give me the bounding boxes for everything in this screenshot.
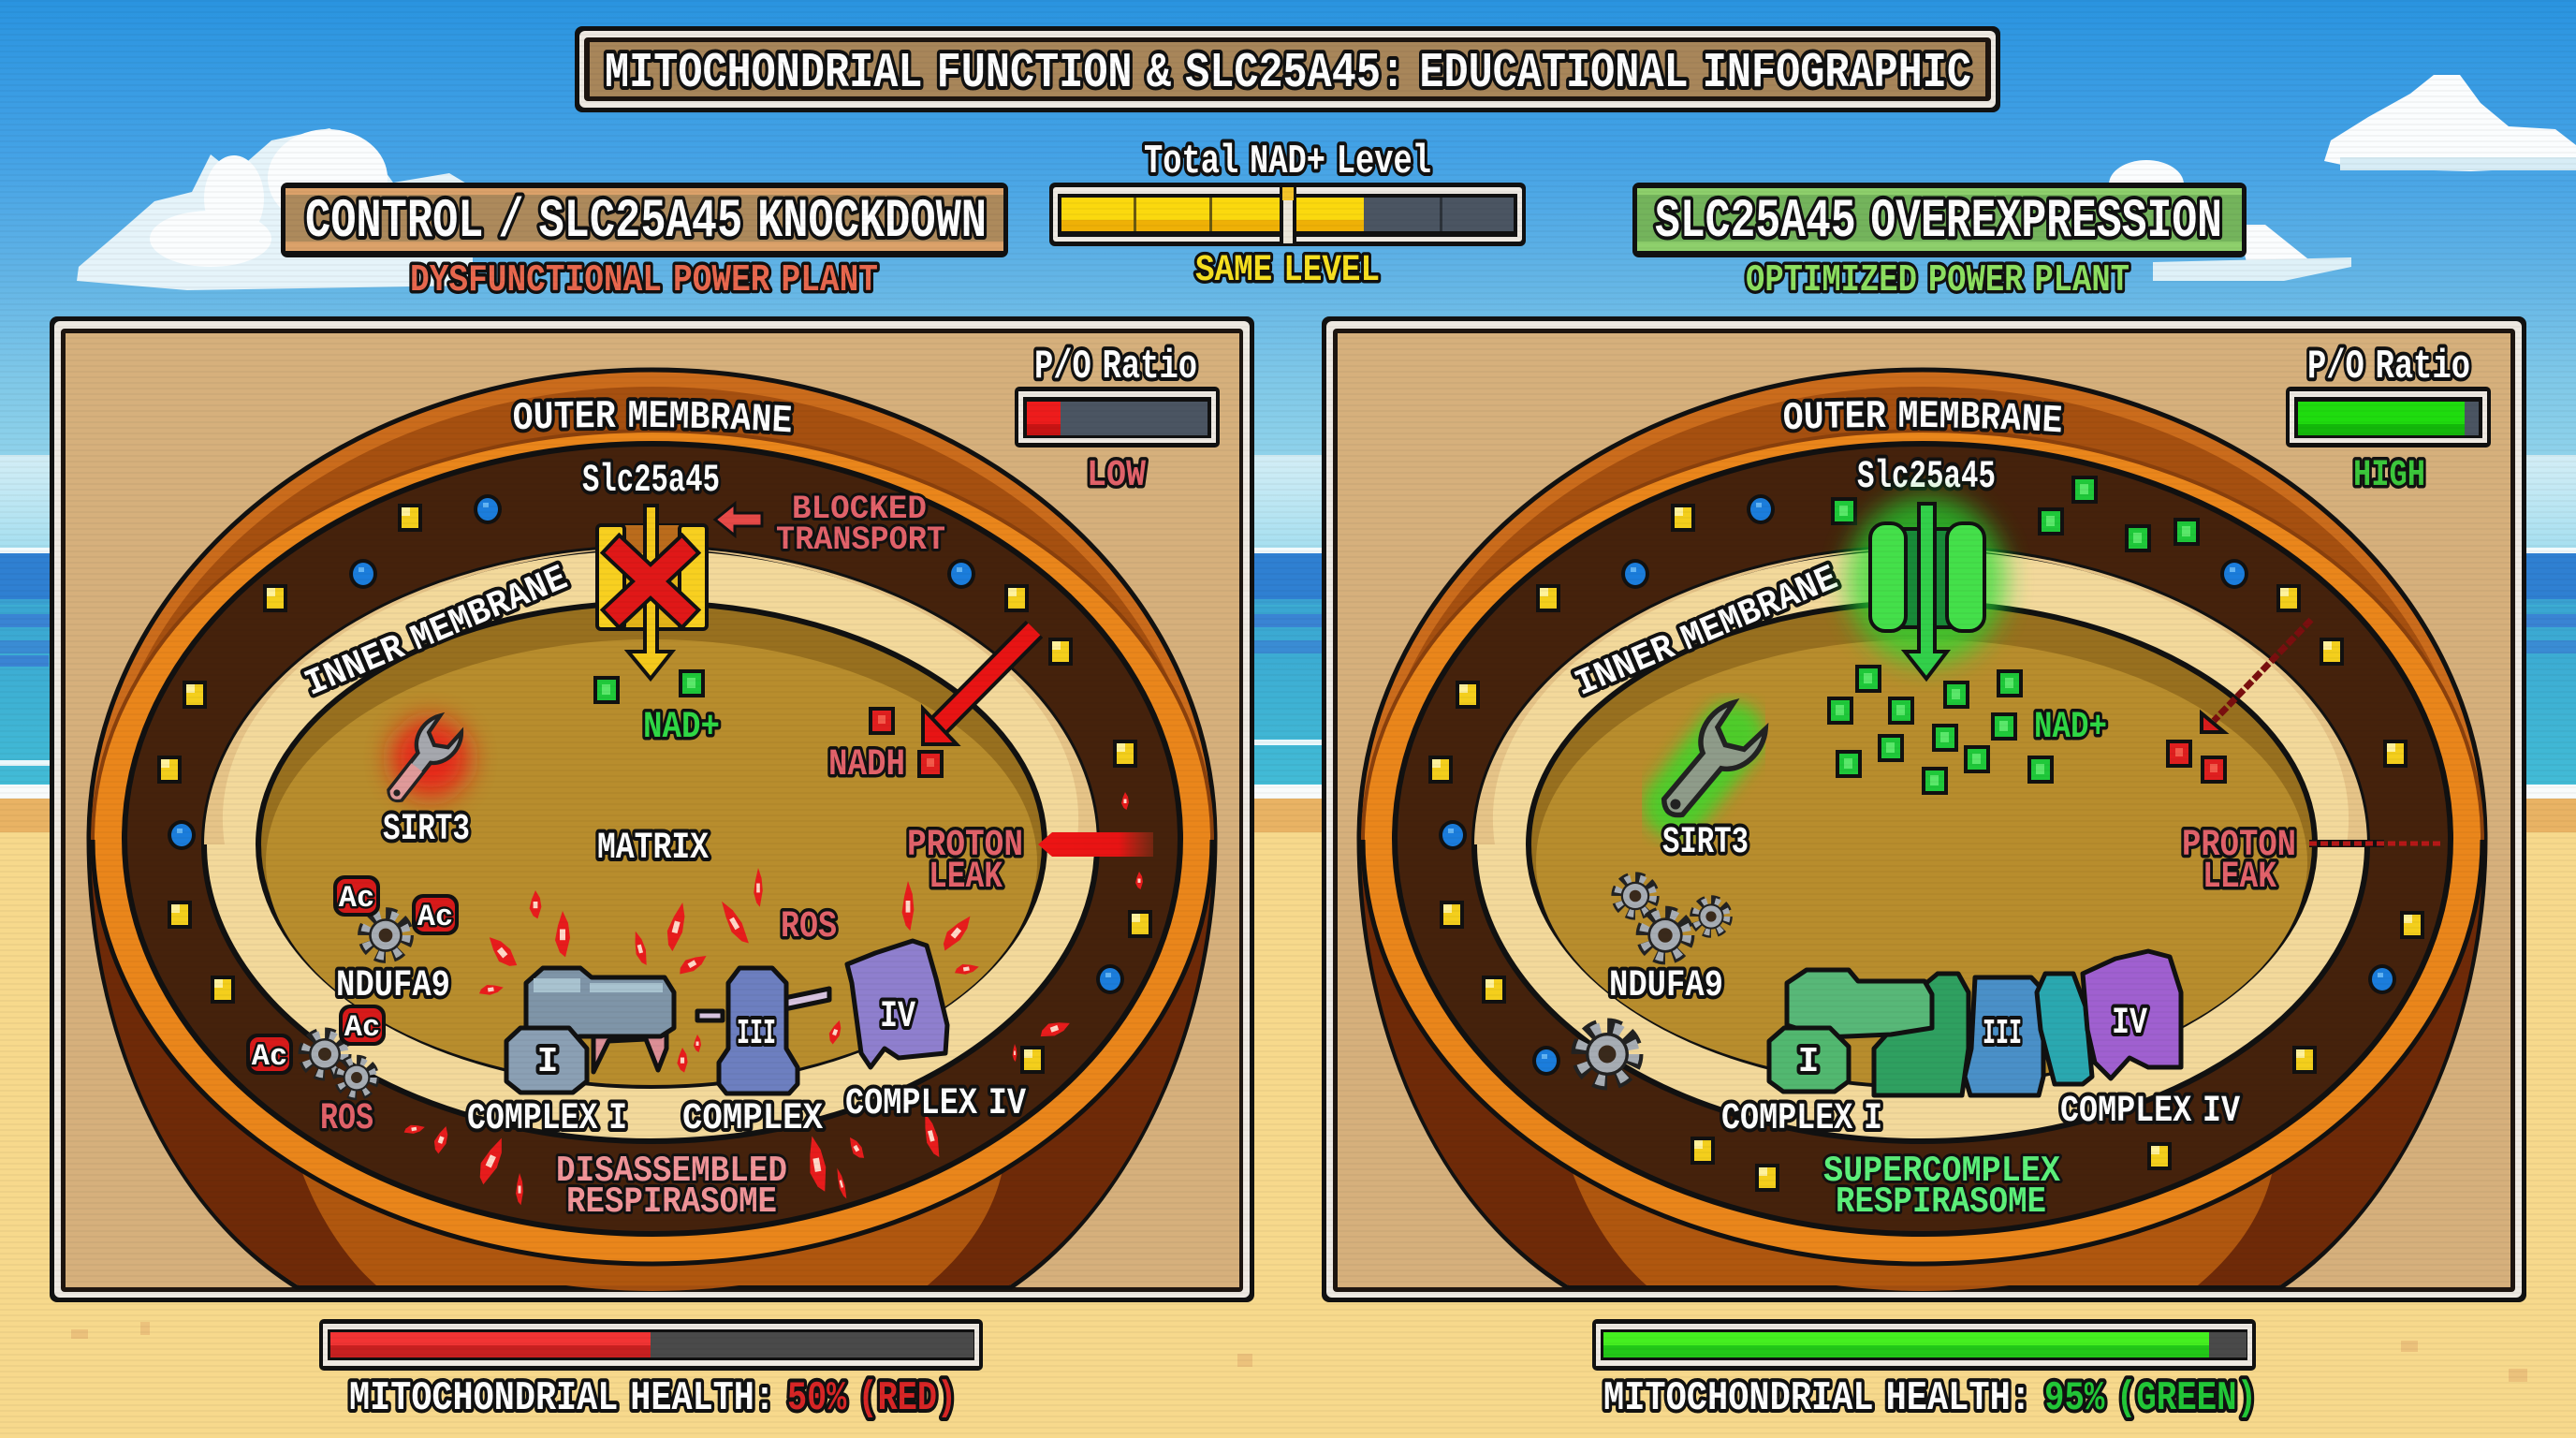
cloud: left — [77, 128, 473, 290]
label: NDUFA9: NDUFA9 — [336, 965, 450, 1007]
title banner — [575, 26, 2000, 112]
transporter: blocked Slc25a45 — [597, 506, 707, 679]
label: P/O ratio: P/O Ratio — [2307, 344, 2470, 390]
label: total NAD+ level: Total NAD+ Level — [1144, 139, 1431, 185]
icon: SIRT3 wrench — [1647, 697, 1772, 830]
particles: intermembrane dots — [157, 494, 1152, 1074]
header: control / knockdown — [281, 183, 1008, 257]
teal subunit — [2037, 974, 2092, 1084]
label: proton leak: PROTON — [2182, 825, 2296, 867]
complex III — [697, 968, 829, 1093]
label: NADH: NADH — [828, 744, 905, 786]
label: NAD+: NAD+ — [643, 707, 720, 749]
label: ROS lower: ROS — [320, 1098, 373, 1140]
label: matrix: MATRIX — [597, 828, 709, 870]
panel: control — [50, 316, 1254, 1302]
health bar: overexpression — [1592, 1319, 2256, 1371]
complex I — [506, 968, 674, 1093]
header: overexpression — [1632, 183, 2247, 257]
title text: MITOCHONDRIAL FUNCTION & SLC25A45: EDUCATIONAL INFOGRAPHIC — [605, 45, 1971, 101]
particles: NADH — [2166, 740, 2227, 784]
mitochondrion — [89, 370, 1215, 1291]
supercomplex: assembled complexes: III — [1983, 1014, 2022, 1054]
label: same level: SAME LEVEL — [1195, 250, 1380, 292]
complex IV body — [2083, 951, 2181, 1078]
label: complex: COMPLEX — [682, 1098, 823, 1140]
label: outer membrane: OUTER MEMBRANE — [511, 397, 794, 436]
icon: SIRT3 wrench — [376, 712, 470, 811]
arrow: proton leak — [1038, 832, 1153, 857]
label: proton leak — [907, 825, 1023, 899]
particles: NADH — [869, 707, 944, 778]
background: sea — [0, 548, 2576, 801]
background: sky — [0, 0, 2576, 455]
label: SIRT3: SIRT3 — [1662, 822, 1749, 864]
particles: NAD+ — [1827, 665, 2054, 795]
supercomplex: assembled complexes: IV — [2112, 1003, 2147, 1045]
subheading: optimized power plant: OPTIMIZED POWER PLANT — [1746, 259, 2130, 302]
complex IV — [847, 941, 947, 1067]
complex IV: IV — [880, 996, 915, 1038]
complex I: I — [537, 1042, 558, 1082]
label: supercomplex respirasome — [1823, 1151, 2061, 1223]
label: proton leak — [2182, 825, 2296, 899]
label: supercomplex respirasome: RESPIRASOME — [1836, 1181, 2046, 1223]
icon: acetylated NDUFA9 lower: Ac — [344, 1010, 380, 1045]
label: complex IV: COMPLEX IV — [2060, 1091, 2240, 1133]
label: proton leak: LEAK — [929, 857, 1003, 899]
label: ROS center: ROS — [781, 906, 837, 948]
gauge marker — [1280, 184, 1296, 246]
label: proton leak: PROTON — [907, 825, 1023, 867]
cloud: right large — [2324, 75, 2576, 171]
complex I body — [1874, 974, 1969, 1095]
label: health 95%: 95% (GREEN) — [2044, 1375, 2257, 1422]
label: NDUFA9: NDUFA9 — [1609, 965, 1723, 1007]
label: health 95%: MITOCHONDRIAL HEALTH: — [1603, 1375, 2031, 1422]
label: Slc25a45: Slc25a45 — [1857, 454, 1996, 499]
label: disassembled respirasome: DISASSEMBLED — [556, 1151, 787, 1192]
arrow: electron leak — [923, 629, 1034, 744]
label: P/O ratio: P/O Ratio — [1034, 344, 1197, 390]
gauge: P/O ratio high — [2286, 387, 2491, 448]
panel frame — [1322, 316, 2526, 1302]
label: disassembled respirasome — [556, 1151, 787, 1223]
particles: intermembrane dots — [1428, 476, 2424, 1192]
background: sand — [0, 799, 2576, 1438]
arrow: reduced electron leak — [2202, 620, 2311, 732]
supercomplex: assembled complexes: I — [1798, 1042, 1819, 1082]
gauge: P/O ratio low — [1015, 387, 1220, 448]
label: blocked transport: BLOCKED — [792, 491, 927, 528]
label: complex I: COMPLEX I — [1721, 1098, 1882, 1140]
label: blocked transport — [776, 491, 945, 559]
label: proton leak: LEAK — [2203, 857, 2276, 899]
label: inner membrane: INNER MEMBRANE — [1570, 558, 1844, 706]
label: health 50%: 50% (RED) — [787, 1375, 957, 1422]
complex III body — [1965, 977, 2043, 1095]
complex III: III — [737, 1014, 776, 1054]
panel frame — [50, 316, 1254, 1302]
label: SIRT3: SIRT3 — [383, 809, 470, 851]
health bar: control — [319, 1319, 983, 1371]
header text: control: CONTROL / SLC25A45 KNOCKDOWN — [305, 192, 987, 253]
subheading: dysfunctional power plant: DYSFUNCTIONAL POWER PLANT — [410, 259, 878, 302]
label: supercomplex respirasome: SUPERCOMPLEX — [1823, 1151, 2061, 1192]
arrow: blocked transport — [715, 504, 762, 536]
mitochondrion — [1359, 370, 2485, 1291]
icon: acetylated NDUFA9 lower: Ac — [252, 1039, 287, 1074]
icon: lone gear — [1582, 1029, 1632, 1079]
icon: acetylated NDUFA9 upper — [333, 875, 459, 955]
label: NAD+: NAD+ — [2034, 707, 2107, 749]
cloud: right small — [2109, 160, 2351, 281]
label: high: HIGH — [2353, 455, 2425, 497]
background: horizon haze — [0, 455, 2576, 549]
header text: overexpression: SLC25A45 OVEREXPRESSION — [1655, 192, 2222, 253]
panel: overexpression — [1322, 316, 2526, 1302]
label: blocked transport: TRANSPORT — [776, 521, 945, 559]
label: outer membrane: OUTER MEMBRANE — [1780, 397, 2065, 436]
icon: acetylated NDUFA9 lower — [246, 1005, 386, 1093]
red X — [620, 552, 681, 610]
supercomplex: assembled complexes — [1769, 951, 2181, 1095]
particles: ROS sparks — [403, 792, 1143, 1205]
label: complex I: COMPLEX I — [467, 1098, 627, 1140]
label: Slc25a45: Slc25a45 — [582, 458, 720, 503]
arrow: proton leak — [2309, 840, 2443, 847]
label: complex IV: COMPLEX IV — [845, 1083, 1026, 1125]
icons: NDUFA9 gears — [1618, 879, 1726, 956]
green arrow — [1905, 504, 1947, 679]
icon: acetylated NDUFA9 upper: Ac — [417, 900, 453, 934]
transporter: active Slc25a45 — [1847, 496, 2006, 679]
label: disassembled respirasome: RESPIRASOME — [566, 1181, 777, 1223]
icon: acetylated NDUFA9 upper: Ac — [339, 881, 374, 916]
label: inner membrane: INNER MEMBRANE — [300, 558, 574, 706]
particles: NAD+ — [593, 669, 705, 704]
yellow arrow — [628, 506, 672, 679]
gauge: total NAD+ level — [1049, 183, 1526, 246]
label: health 50%: MITOCHONDRIAL HEALTH: — [349, 1375, 775, 1422]
label: low: LOW — [1087, 455, 1146, 497]
